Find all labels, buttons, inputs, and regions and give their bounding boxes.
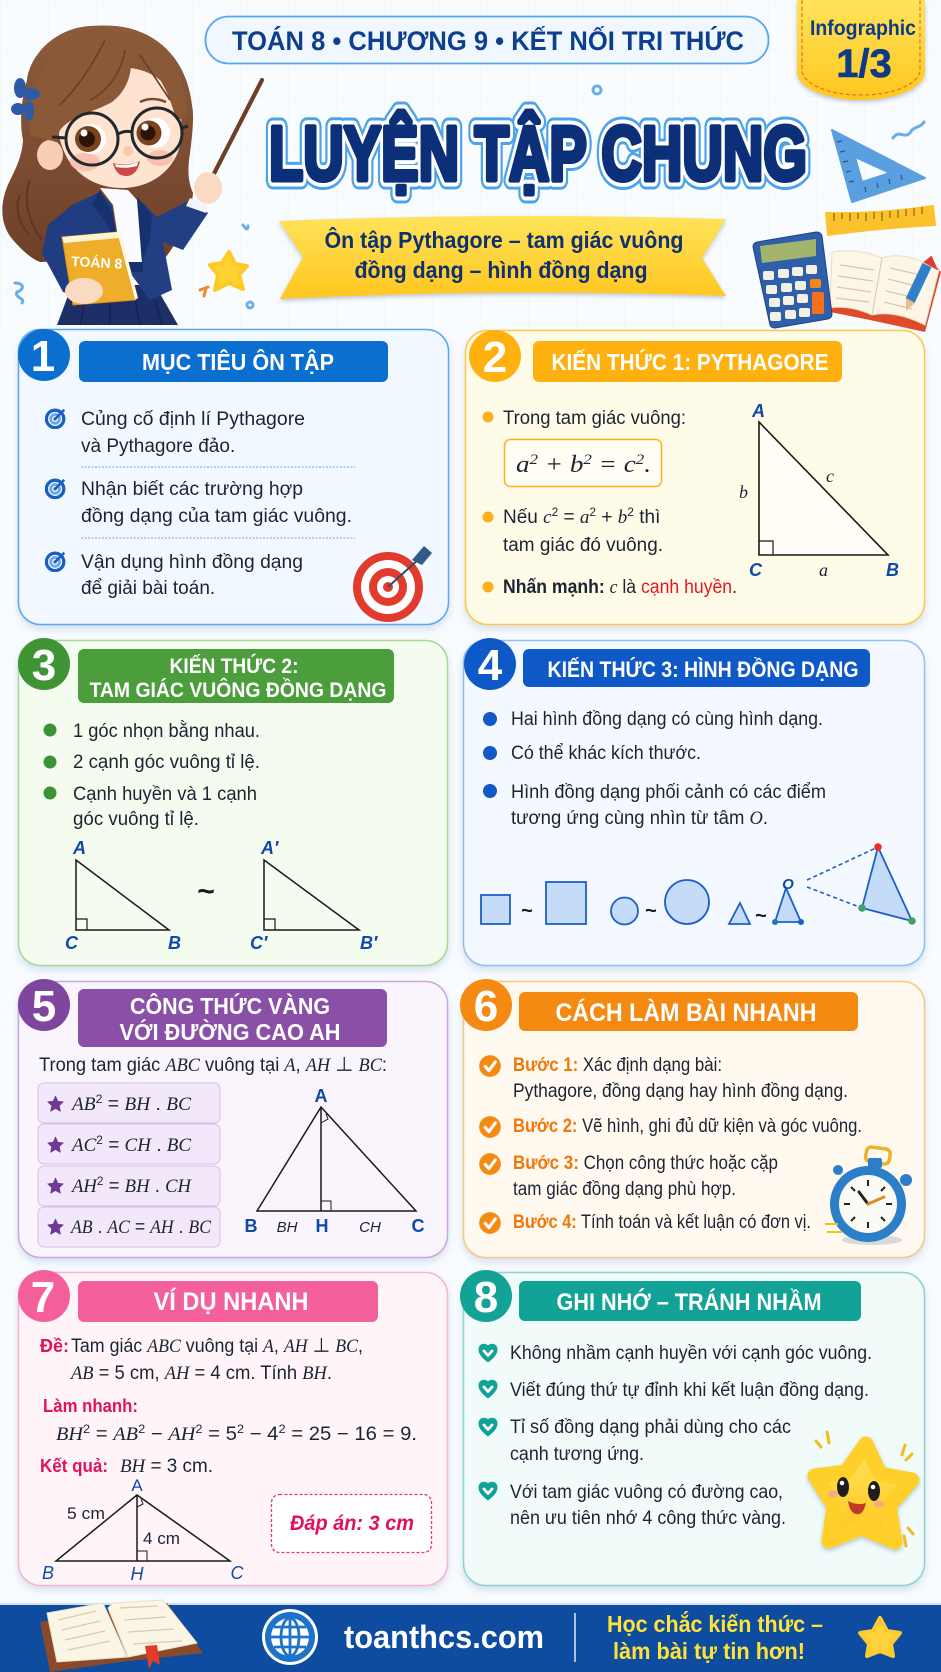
formula 1 xyxy=(38,1083,220,1123)
slogan: làm bài tự tin hơn! xyxy=(613,1638,805,1664)
panel 5: golden formulas xyxy=(18,979,448,1258)
converse xyxy=(482,505,663,556)
heading 5: VỚI ĐƯỜNG CAO AH xyxy=(120,1018,340,1045)
illustration: teacher girl with pointer and book xyxy=(2,26,262,325)
similar shapes diagram: ~ xyxy=(755,905,767,927)
heading 7 xyxy=(78,1281,378,1322)
formula 3 xyxy=(38,1166,220,1206)
ribbon subtitle xyxy=(279,216,726,299)
icon: pencil xyxy=(906,258,935,311)
result: Kết quả: xyxy=(40,1456,108,1476)
bullet list: Có thể khác kích thước. xyxy=(511,743,701,764)
badge 4 xyxy=(464,638,516,690)
formula box xyxy=(504,440,662,486)
bullet list: tương ứng cùng nhìn từ tâm O. xyxy=(511,808,768,829)
panel 7: quick example xyxy=(18,1270,448,1586)
similar shapes diagram: ~ xyxy=(645,900,657,922)
badge 7: 7 xyxy=(31,1273,55,1322)
triangle with altitude AH: BH xyxy=(277,1219,298,1236)
badge 1 xyxy=(18,329,70,381)
panel 2: Pythagore xyxy=(466,330,924,624)
heading 6 xyxy=(519,992,858,1031)
badge 8: 8 xyxy=(474,1273,498,1322)
right triangle ABC xyxy=(739,401,899,580)
badge 5: 5 xyxy=(32,982,56,1031)
panel 8: remember xyxy=(460,1270,924,1586)
formula 2 xyxy=(38,1124,220,1164)
icon: globe xyxy=(262,1609,318,1665)
badge 2: 2 xyxy=(483,333,507,382)
eyebrow xyxy=(140,99,166,102)
triangle ABC: A xyxy=(72,838,86,858)
triangle figure: C xyxy=(230,1563,244,1583)
tag: Infographic 1/3: 1/3 xyxy=(836,42,892,86)
skirt xyxy=(57,285,178,325)
quick solution: BH2 = AB2 − AH2 = 52 − 42 = 25 − 16 = 9. xyxy=(56,1422,417,1445)
shirt xyxy=(100,188,142,264)
objective 1: và Pythagore đảo. xyxy=(81,436,235,457)
converse: Nếu c2 = a2 + b2 thì xyxy=(503,505,660,528)
step 4: Bước 4: Tính toán và kết luận có đơn vị. xyxy=(513,1212,811,1233)
triangle with altitude AH: C xyxy=(412,1216,424,1236)
triangle figure: 4 cm xyxy=(143,1529,180,1548)
problem statement xyxy=(40,1336,363,1384)
triangle A'B'C': A′ xyxy=(260,838,279,858)
triangle figure: B xyxy=(42,1563,54,1583)
bullet list xyxy=(44,720,260,830)
quick solution xyxy=(43,1396,417,1445)
note list: nên ưu tiên nhớ 4 công thức vàng. xyxy=(510,1508,786,1529)
right triangle ABC: A xyxy=(751,401,765,421)
heading 1: MỤC TIÊU ÔN TẬP xyxy=(142,348,334,375)
formula 4 xyxy=(38,1207,220,1247)
converse: tam giác đó vuông. xyxy=(503,535,663,556)
objective 3 xyxy=(46,552,303,599)
heading 1 xyxy=(79,341,388,382)
footer band xyxy=(0,1600,941,1672)
cheeks xyxy=(70,153,100,171)
panel 3: similar right triangles xyxy=(18,638,448,966)
heading 8: GHI NHỚ – TRÁNH NHẦM xyxy=(556,1288,822,1316)
decoration: small blue squiggles xyxy=(15,86,924,308)
heading 6: CÁCH LÀM BÀI NHANH xyxy=(556,998,816,1027)
objective 2: Nhận biết các trường hợp xyxy=(81,479,303,500)
heading 8 xyxy=(519,1281,861,1321)
tag: Infographic 1/3: Infographic xyxy=(810,17,916,40)
similar shapes diagram xyxy=(481,843,916,927)
mouth xyxy=(113,161,140,176)
heading 3: KIẾN THỨC 2: xyxy=(170,654,298,678)
similar shapes diagram: ~ xyxy=(521,900,533,922)
bullet text: Trong tam giác vuông: xyxy=(503,408,686,429)
heading 5 xyxy=(78,989,387,1047)
icon: open book with bookmark xyxy=(40,1600,203,1672)
nose xyxy=(123,146,133,156)
icon: set square xyxy=(832,130,925,202)
note list: Viết đúng thứ tự đỉnh khi kết luận đồng dạng. xyxy=(510,1380,869,1401)
badge 8 xyxy=(460,1270,512,1322)
answer box xyxy=(272,1494,432,1552)
objective 2 xyxy=(46,479,352,527)
heading 4 xyxy=(523,649,870,687)
tag: Infographic 1/3 xyxy=(797,0,925,100)
icon: yellow ruler xyxy=(826,206,935,235)
badge 6: 6 xyxy=(474,982,498,1031)
badge 6 xyxy=(460,979,512,1031)
formula 3: AH2 = BH . CH xyxy=(70,1174,192,1197)
panel 6: quick method xyxy=(460,979,924,1258)
triangle with altitude AH: B xyxy=(244,1216,258,1236)
triangle A'B'C': B′ xyxy=(360,933,378,953)
answer box: Đáp án: 3 cm xyxy=(290,1512,414,1535)
note list: Với tam giác vuông có đường cao, xyxy=(510,1482,783,1503)
problem statement: AB = 5 cm, AH = 4 cm. Tính BH. xyxy=(69,1363,332,1384)
glasses xyxy=(66,113,118,165)
icon: calculator xyxy=(753,232,832,328)
heading 2: KIẾN THỨC 1: PYTHAGORE xyxy=(552,348,828,375)
pointer stick xyxy=(201,80,262,199)
badge 4: 4 xyxy=(478,641,503,690)
triangle figure xyxy=(42,1476,244,1584)
objective 2: đồng dạng của tam giác vuông. xyxy=(81,506,352,527)
website: toanthcs.com xyxy=(344,1619,544,1655)
similarity sign: ~ xyxy=(197,875,215,908)
step 3: tam giác đồng dạng phù hợp. xyxy=(513,1179,736,1200)
icon: stopwatch xyxy=(825,1146,912,1245)
right triangle ABC: a xyxy=(819,560,828,580)
illustration: teacher girl with pointer and book: TOÁN 8 xyxy=(71,253,123,272)
step 1 xyxy=(479,1055,848,1102)
note list: cạnh tương ứng. xyxy=(510,1444,644,1465)
bullet list: góc vuông tỉ lệ. xyxy=(73,809,199,830)
emphasis: Nhấn mạnh: c là cạnh huyền. xyxy=(503,577,737,598)
ribbon subtitle: Ôn tập Pythagore – tam giác vuông xyxy=(324,226,684,253)
triangle figure: 5 cm xyxy=(67,1504,105,1523)
badge 7 xyxy=(18,1270,70,1322)
problem statement: Tam giác ABC vuông tại A, AH ⊥ BC, xyxy=(71,1336,363,1357)
right triangle ABC: b xyxy=(739,482,748,502)
bullet list: Hình đồng dạng phối cảnh có các điểm xyxy=(511,782,826,803)
heading 2 xyxy=(533,341,842,382)
triangle A'B'C' xyxy=(250,838,378,953)
eyes xyxy=(76,124,106,154)
panel 1: objectives xyxy=(18,329,448,624)
ribbon subtitle: đồng dạng – hình đồng dạng xyxy=(354,257,648,283)
note list xyxy=(478,1343,872,1529)
step 2: Bước 2: Vẽ hình, ghi đủ dữ kiện và góc vuông. xyxy=(513,1116,862,1137)
triangle A'B'C': C′ xyxy=(250,933,268,953)
formula 4: AB . AC = AH . BC xyxy=(69,1217,211,1238)
heading 3: TAM GIÁC VUÔNG ĐỒNG DẠNG xyxy=(90,678,386,702)
note list: Tỉ số đồng dạng phải dùng cho các xyxy=(510,1417,791,1438)
triangle figure: A xyxy=(131,1476,143,1495)
decoration: gold star xyxy=(210,252,247,290)
triangle ABC: B xyxy=(168,933,181,953)
hair clip xyxy=(11,78,40,121)
right triangle ABC: c xyxy=(826,466,834,486)
step 3 xyxy=(479,1153,778,1200)
similar shapes diagram: O xyxy=(782,876,794,893)
step 1: Bước 1: Xác định dạng bài: xyxy=(513,1055,722,1076)
formula 1: AB2 = BH . BC xyxy=(70,1092,191,1115)
triangle with altitude AH: A xyxy=(314,1086,328,1106)
shirt cuff xyxy=(186,198,208,213)
formula box: a2 + b 2 = c 2. xyxy=(516,452,651,478)
face xyxy=(37,140,63,170)
result: BH = 3 cm. xyxy=(120,1456,213,1477)
step 1: Pythagore, đồng dạng hay hình đồng dạng. xyxy=(513,1081,848,1102)
top pill: course label: TOÁN 8 • CHƯƠNG 9 • KẾT NỐI TRI THỨC xyxy=(232,24,744,56)
triangle with altitude AH: CH xyxy=(359,1219,381,1236)
step 3: Bước 3: Chọn công thức hoặc cặp xyxy=(513,1153,778,1174)
result xyxy=(40,1456,213,1477)
badge 5 xyxy=(18,979,70,1031)
panel 4: similar figures xyxy=(464,638,924,966)
icon: star xyxy=(860,1618,900,1656)
bullet list: 2 cạnh góc vuông tỉ lệ. xyxy=(73,752,260,773)
icon: smiling star xyxy=(815,1432,913,1546)
intro line: Trong tam giác ABC vuông tại A, AH ⊥ BC: xyxy=(39,1055,387,1076)
heading 3 xyxy=(78,649,394,703)
blazer xyxy=(42,192,120,300)
right hand xyxy=(194,172,222,204)
book xyxy=(62,232,135,305)
triangle with altitude AH: H xyxy=(316,1216,328,1236)
objective 1 xyxy=(46,409,305,457)
badge 1: 1 xyxy=(31,332,55,381)
icon: target with dart xyxy=(353,546,432,622)
bullet list: Cạnh huyền và 1 cạnh xyxy=(73,784,257,805)
triangle figure: H xyxy=(130,1564,144,1584)
bullet list: 1 góc nhọn bằng nhau. xyxy=(73,720,260,742)
right triangle ABC: C xyxy=(749,560,763,580)
slogan xyxy=(607,1610,823,1664)
badge 2 xyxy=(469,330,521,382)
problem statement: Đề: xyxy=(40,1336,69,1356)
bullet list: Hai hình đồng dạng có cùng hình dạng. xyxy=(511,709,823,730)
quick solution: Làm nhanh: xyxy=(43,1396,138,1416)
objective 3: để giải bài toán. xyxy=(81,578,215,599)
left hand xyxy=(65,278,103,304)
bangs xyxy=(29,28,131,142)
triangle ABC: C xyxy=(65,933,79,953)
hair back xyxy=(2,26,193,262)
badge 3: 3 xyxy=(32,641,56,690)
heading 5: CÔNG THỨC VÀNG xyxy=(130,992,330,1019)
triangle with altitude AH xyxy=(244,1086,424,1236)
bullet list xyxy=(483,709,826,829)
triangle ABC xyxy=(65,838,181,953)
note list: Không nhầm cạnh huyền với cạnh góc vuông. xyxy=(510,1343,872,1364)
heading 4: KIẾN THỨC 3: HÌNH ĐỒNG DẠNG xyxy=(548,657,858,682)
right triangle ABC: B xyxy=(886,560,899,580)
heading 7: VÍ DỤ NHANH xyxy=(154,1287,308,1316)
objective 3: Vận dụng hình đồng dạng xyxy=(81,552,303,573)
top pill: course label xyxy=(206,16,768,64)
objective 1: Củng cố định lí Pythagore xyxy=(81,409,305,430)
icon: open book xyxy=(828,251,941,332)
formula 2: AC2 = CH . BC xyxy=(70,1133,191,1156)
slogan: Học chắc kiến thức – xyxy=(607,1610,823,1637)
badge 3 xyxy=(18,638,70,690)
